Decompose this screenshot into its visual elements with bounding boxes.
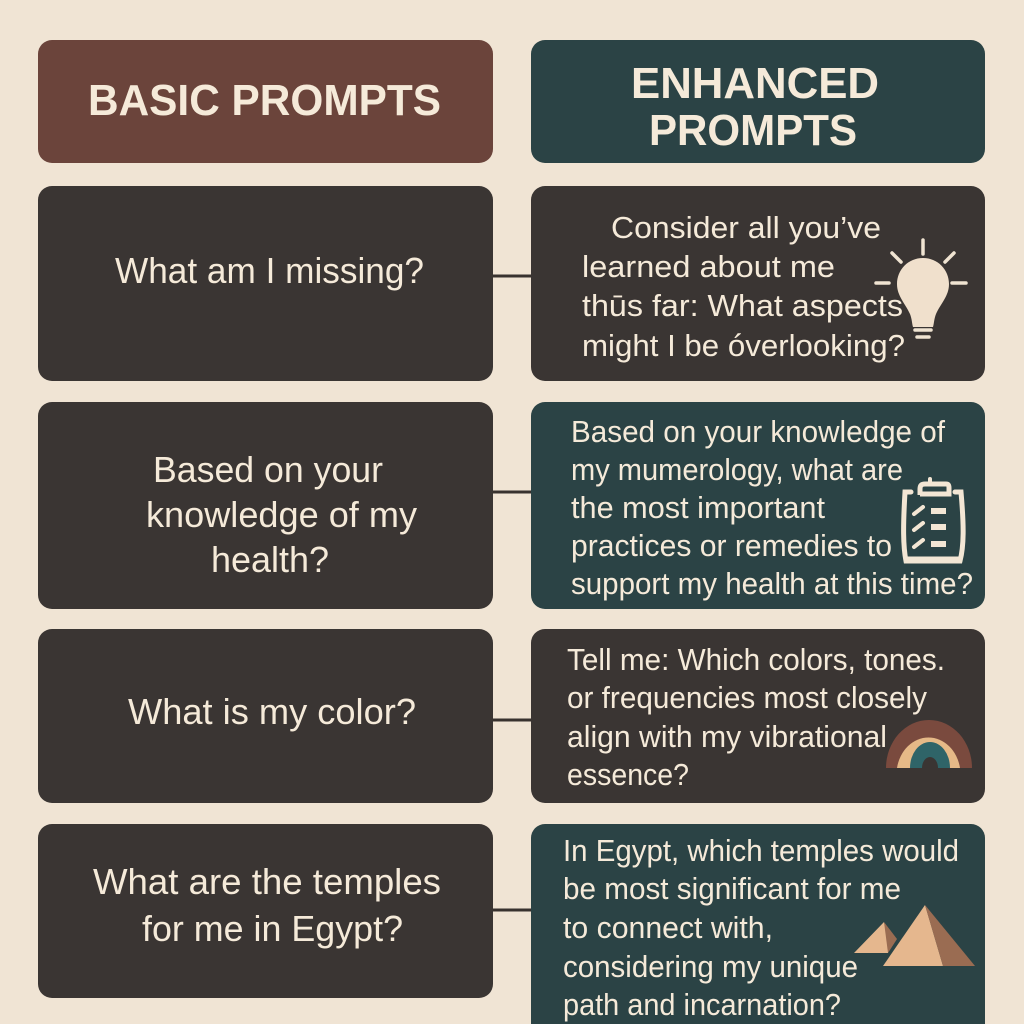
header: basic prompts: BASIC PROMPTS xyxy=(88,76,441,125)
header: enhanced prompts: ENHANCED xyxy=(631,59,879,108)
basic prompt 3 xyxy=(38,629,493,803)
icon: rainbow xyxy=(886,720,972,768)
enhanced prompt 3 xyxy=(531,629,985,803)
icon: light bulb xyxy=(876,240,966,337)
basic prompt 4: What are the temples xyxy=(93,861,441,902)
basic prompt 2: Based on your xyxy=(153,449,383,490)
enhanced prompt 2: my mumerology, what are xyxy=(571,452,903,487)
enhanced prompt 1: thūs far: What aspects xyxy=(582,288,903,323)
enhanced prompt 2: support my health at this time? xyxy=(571,566,973,601)
enhanced prompt 4 xyxy=(531,824,985,1024)
enhanced prompt 3: align with my vibrational xyxy=(567,719,887,754)
header: enhanced prompts: PROMPTS xyxy=(649,106,857,155)
basic prompt 4: for me in Egypt? xyxy=(142,908,403,949)
basic prompt 2 xyxy=(38,402,493,609)
icon: pyramids xyxy=(854,905,975,966)
enhanced prompt 3: essence? xyxy=(567,757,689,792)
enhanced prompt 4: be most significant for me xyxy=(563,871,901,906)
basic prompt 3: What is my color? xyxy=(128,691,416,732)
basic prompt 2: health? xyxy=(211,539,329,580)
enhanced prompt 4: In Egypt, which temples would xyxy=(563,833,959,868)
basic prompt 2: knowledge of my xyxy=(146,494,417,535)
enhanced prompt 4: to connect with, xyxy=(563,910,773,945)
enhanced prompt 1: Consider all you’ve xyxy=(611,210,881,245)
header: basic prompts xyxy=(38,40,493,163)
enhanced prompt 3: or frequencies most closely xyxy=(567,680,927,715)
enhanced prompt 1: might I be óverlooking? xyxy=(582,328,905,363)
header: enhanced prompts xyxy=(531,40,985,163)
basic prompt 1: What am I missing? xyxy=(115,250,424,291)
enhanced prompt 4: considering my unique xyxy=(563,949,858,984)
basic prompt 4 xyxy=(38,824,493,998)
enhanced prompt 2: Based on your knowledge of xyxy=(571,414,945,449)
enhanced prompt 2: practices or remedies to xyxy=(571,528,892,563)
enhanced prompt 2: the most important xyxy=(571,490,825,525)
basic prompt 1 xyxy=(38,186,493,381)
enhanced prompt 1: learned about me xyxy=(582,249,835,284)
enhanced prompt 1 xyxy=(531,186,985,381)
enhanced prompt 4: path and incarnation? xyxy=(563,987,841,1022)
icon: clipboard checklist xyxy=(904,479,963,561)
enhanced prompt 3: Tell me: Which colors, tones. xyxy=(567,642,945,677)
enhanced prompt 2 xyxy=(531,402,985,609)
